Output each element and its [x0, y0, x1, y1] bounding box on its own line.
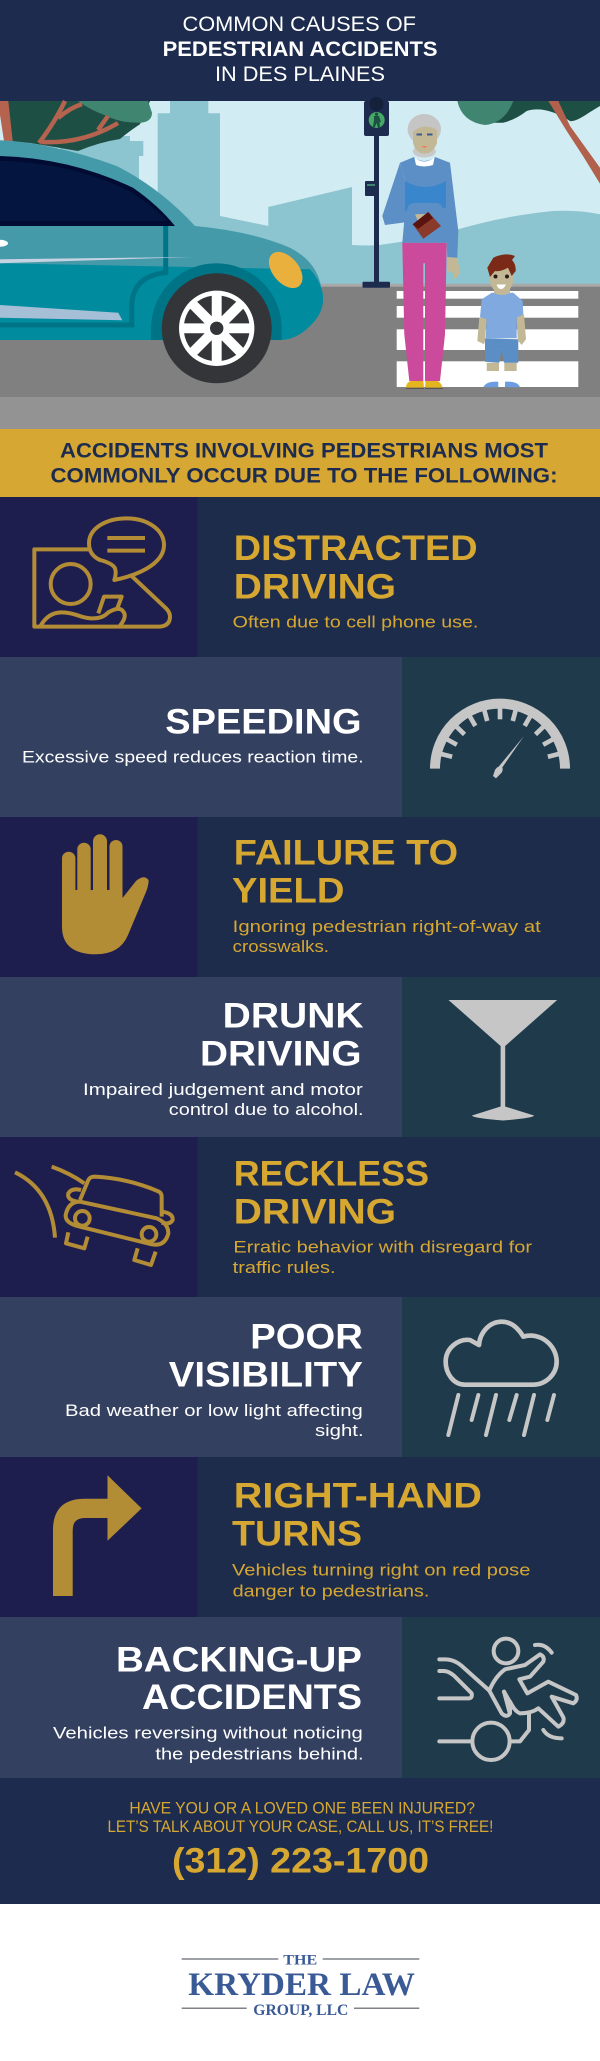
heading and text: ACCIDENTS: [142, 1678, 362, 1717]
icon: distracted driver: [34, 518, 170, 627]
icon: martini glass: [448, 1000, 557, 1120]
call to action text: LET’S TALK ABOUT YOUR CASE, CALL US, IT’S FREE!: [108, 1818, 493, 1836]
panel: right-hand turns: [0, 1457, 600, 1617]
heading and text: control due to alcohol.: [169, 1100, 364, 1119]
panel: backing-up accidents: [0, 1617, 600, 1778]
heading and text: VISIBILITY: [169, 1356, 363, 1395]
heading and text: crosswalks.: [233, 937, 329, 956]
car: [0, 140, 323, 383]
panel: reckless driving: [0, 1137, 600, 1297]
panel: failure to yield: [0, 817, 600, 977]
heading and text: DRIVING: [200, 1035, 362, 1074]
heading and text: RIGHT-HAND: [234, 1477, 482, 1516]
banner: intro: [0, 429, 600, 497]
road: [0, 284, 600, 429]
logo: The Kryder Law Group: GROUP, LLC: [253, 2002, 348, 2019]
heading and text: Excessive speed reduces reaction time.: [22, 748, 364, 767]
heading and text: [232, 833, 541, 956]
call to action text: [108, 1800, 493, 1836]
icon: rain cloud: [446, 1322, 557, 1435]
heading and text: [53, 1640, 364, 1763]
city skyline: [60, 101, 600, 286]
heading and text: YIELD: [232, 872, 344, 911]
call to action text: HAVE YOU OR A LOVED ONE BEEN INJURED?: [129, 1800, 475, 1818]
icon: swerving car: [15, 1167, 173, 1265]
logo: The Kryder Law Group: KRYDER LAW: [188, 1967, 415, 2003]
heading and text: the pedestrians behind.: [155, 1744, 364, 1763]
title: [163, 13, 438, 86]
phone number: (312) 223-1700: [172, 1842, 429, 1881]
heading and text: DRIVING: [234, 1192, 396, 1231]
panel: poor visibility: [0, 1297, 600, 1457]
illustration: street scene: [0, 97, 600, 429]
heading and text: DISTRACTED: [234, 529, 478, 568]
banner: intro: COMMONLY OCCUR DUE TO THE FOLLOWING:: [50, 464, 558, 487]
heading and text: Bad weather or low light affecting: [65, 1401, 363, 1420]
footer call to action: [0, 1778, 600, 1904]
heading and text: Often due to cell phone use.: [233, 613, 478, 632]
heading and text: Erratic behavior with disregard for: [233, 1237, 532, 1256]
logo: The Kryder Law Group: [182, 1952, 419, 2019]
title: IN DES PLAINES: [215, 63, 385, 86]
heading and text: Vehicles reversing without noticing: [53, 1724, 363, 1743]
heading and text: traffic rules.: [233, 1258, 336, 1277]
panel: drunk driving: [0, 977, 600, 1137]
icon: raised hand: [62, 834, 149, 954]
banner: intro: ACCIDENTS INVOLVING PEDESTRIANS MOST: [60, 440, 548, 463]
heading and text: [83, 997, 364, 1119]
woman: [382, 114, 460, 389]
boy: [477, 254, 526, 387]
heading and text: DRIVING: [234, 567, 396, 606]
heading and text: Vehicles turning right on red pose: [232, 1560, 530, 1579]
tree left: [0, 101, 152, 151]
heading and text: [233, 1155, 532, 1277]
panel: distracted driving: [0, 497, 600, 657]
panel: speeding: [0, 657, 600, 817]
heading and text: Impaired judgement and motor: [83, 1080, 363, 1099]
heading and text: danger to pedestrians.: [233, 1582, 429, 1600]
title: COMMON CAUSES OF: [182, 13, 416, 36]
heading and text: Ignoring pedestrian right-of-way at: [233, 917, 541, 936]
icon: pedestrian hit by car: [439, 1639, 577, 1760]
crosswalk: [397, 291, 578, 387]
heading and text: BACKING-UP: [116, 1640, 362, 1679]
heading and text: RECKLESS: [234, 1155, 429, 1194]
heading and text: [232, 1477, 530, 1600]
heading and text: [22, 702, 364, 767]
icon: speedometer: [435, 704, 565, 778]
title: PEDESTRIAN ACCIDENTS: [163, 38, 438, 61]
heading and text: SPEEDING: [165, 702, 362, 741]
traffic light: [362, 97, 390, 288]
heading and text: POOR: [250, 1317, 363, 1356]
wheel: [162, 273, 272, 383]
heading and text: [65, 1317, 364, 1440]
heading and text: [233, 529, 478, 632]
heading and text: FAILURE TO: [234, 833, 458, 872]
tree right: [457, 101, 600, 184]
heading and text: DRUNK: [223, 997, 364, 1036]
icon: right turn arrow: [53, 1475, 142, 1596]
heading and text: sight.: [315, 1421, 364, 1440]
logo: The Kryder Law Group: THE: [283, 1952, 317, 1968]
header panel: [0, 0, 600, 101]
heading and text: TURNS: [232, 1514, 362, 1553]
